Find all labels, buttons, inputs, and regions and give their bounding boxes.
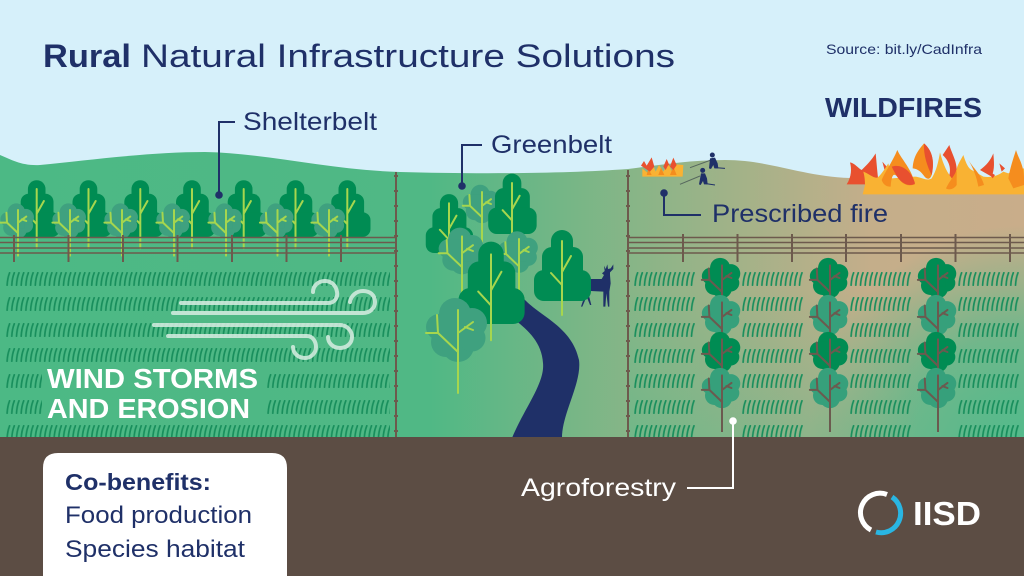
label: shelterbelt bbox=[215, 108, 377, 199]
title: Natural Infrastructure Solutions bbox=[141, 38, 675, 74]
title: Rural bbox=[43, 38, 131, 74]
land: hill and fields bbox=[0, 152, 1024, 440]
panel: shelterbelt trees bbox=[0, 180, 371, 256]
fence posts: vertical dividers bbox=[396, 170, 628, 437]
label: prescribed fire: Prescribed fire bbox=[712, 200, 888, 228]
fence: left bbox=[0, 235, 396, 262]
heading: wind storms and erosion: AND EROSION bbox=[47, 393, 250, 424]
icon: greenbelt tree, dark centre bbox=[459, 242, 525, 340]
heading: wildfires: WILDFIRES bbox=[825, 92, 982, 123]
heading: wind storms and erosion: WIND STORMS bbox=[47, 363, 258, 394]
source note: Source: bit.ly/CadInfra bbox=[826, 41, 982, 57]
small prescribed fire bbox=[641, 157, 683, 177]
logo: IISD: IISD bbox=[913, 495, 981, 532]
icon: small shelterbelt trees bbox=[0, 203, 345, 239]
panel: co-benefits: Species habitat bbox=[65, 536, 245, 563]
label: shelterbelt: Shelterbelt bbox=[243, 108, 377, 136]
icon: greenbelt tree, dark top bbox=[488, 174, 537, 246]
panel: co-benefits: Co-benefits: bbox=[65, 469, 211, 495]
logo: IISD bbox=[860, 493, 981, 533]
title bbox=[43, 38, 675, 74]
icon: greenbelt tree, light left bbox=[439, 228, 483, 297]
icon: deer bbox=[581, 264, 613, 307]
icon: greenbelt tree, light back bbox=[463, 185, 499, 242]
icon: river bbox=[512, 299, 579, 438]
crop rows: left field bbox=[6, 272, 390, 439]
label: agroforestry: Agroforestry bbox=[521, 474, 677, 502]
fence: right bbox=[628, 234, 1024, 262]
label: greenbelt: Greenbelt bbox=[491, 131, 612, 159]
icon: greenbelt tree, dark left bbox=[426, 194, 473, 265]
icon: greenbelt tree, light right bbox=[498, 231, 538, 293]
big wildfire flames bbox=[847, 143, 1024, 194]
label: prescribed fire bbox=[660, 189, 888, 228]
label: agroforestry bbox=[521, 417, 737, 502]
icon: greenbelt tree, dark right bbox=[534, 230, 591, 315]
icon: greenbelt tree, light front bbox=[426, 298, 487, 393]
panel: co-benefits: Food production bbox=[65, 502, 252, 529]
crop rows: right field bbox=[634, 272, 1019, 439]
label: greenbelt bbox=[458, 131, 612, 190]
panel: co-benefits bbox=[43, 453, 287, 576]
heading: wind storms and erosion bbox=[47, 363, 258, 424]
firefighters with hoses bbox=[680, 152, 725, 185]
greenbelt trees and river bbox=[426, 174, 613, 438]
icon: wind gusts bbox=[154, 281, 375, 358]
lower-right green tint bbox=[629, 225, 1024, 440]
icon: tall shelterbelt trees bbox=[14, 180, 371, 237]
ground bbox=[0, 437, 1024, 576]
agroforestry trees bbox=[702, 258, 956, 432]
